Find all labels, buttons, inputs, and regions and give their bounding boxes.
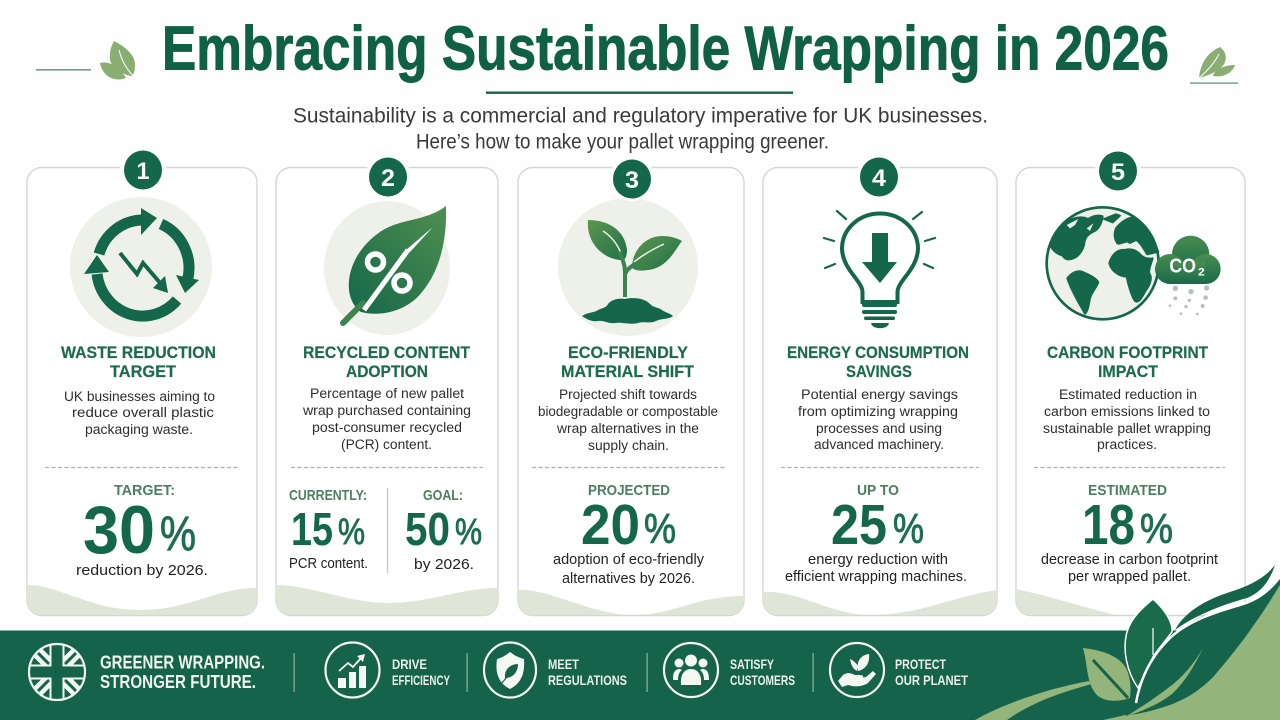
stat: 30 percent: % [160, 508, 196, 561]
stat: 20 percent: % [644, 505, 676, 552]
heading [787, 343, 969, 381]
icon: leaf with percent sign [324, 201, 450, 335]
description: post-consumer recycled [312, 420, 462, 436]
footer slogan [100, 652, 265, 692]
heading: ENERGY CONSUMPTION [787, 343, 969, 362]
icon: seedling in soil [558, 198, 698, 336]
stat: 30 percent: reduction by 2026. [76, 562, 208, 579]
stat: 18 percent [1041, 482, 1219, 585]
benefit: meet regulations: MEET [548, 656, 579, 672]
heading: RECYCLED CONTENT [303, 343, 471, 362]
panel: card 2 recycled content [276, 155, 498, 616]
stat: 25 percent: UP TO [857, 482, 899, 499]
icon: UK flag circle [28, 642, 86, 702]
decoration: right leaves [1190, 47, 1238, 84]
description: wrap purchased containing [302, 403, 471, 419]
description: advanced machinery. [814, 437, 944, 453]
description: from optimizing wrapping [798, 404, 958, 420]
stat: goal 50 percent: GOAL: [423, 487, 463, 504]
panel: card 3 eco-friendly material [518, 157, 744, 616]
stat: 30 percent: 30 [83, 492, 155, 568]
stat: 20 percent: alternatives by 2026. [562, 570, 695, 587]
description: processes and using [816, 421, 942, 437]
icon: recycling arrows with falling waste [70, 197, 212, 337]
description: Percentage of new pallet [310, 386, 464, 402]
stat: currently 15 percent: 15 [291, 503, 333, 555]
number badge 1 [120, 148, 166, 192]
stat: 25 percent: energy reduction with [808, 551, 948, 568]
description: wrap alternatives in the [556, 421, 699, 437]
footer slogan: GREENER WRAPPING. [100, 652, 265, 672]
stat: 30 percent: TARGET: [114, 482, 175, 499]
stat: 18 percent: decrease in carbon footprint [1041, 551, 1219, 568]
stat: 18 percent: ESTIMATED [1088, 482, 1167, 499]
stat: goal 50 percent: by 2026. [414, 556, 474, 573]
panel: card 5 carbon footprint [1016, 149, 1245, 616]
footer slogan: STRONGER FUTURE. [100, 672, 256, 692]
description: sustainable pallet wrapping [1043, 421, 1211, 437]
number badge 2 [365, 155, 411, 199]
description [302, 386, 471, 453]
subtitle: Here’s how to make your pallet wrapping greener. [416, 130, 829, 154]
subtitle: Sustainability is a commercial and regulatory imperative for UK businesses. [293, 104, 988, 128]
stat: 25 percent: 25 [831, 493, 887, 557]
heading [303, 343, 471, 381]
number badge 3: 3 [625, 167, 639, 194]
benefit: meet regulations [484, 642, 627, 698]
description [64, 389, 215, 438]
stat: currently 15 percent: % [338, 511, 365, 552]
stat: goal 50 percent: % [455, 511, 482, 552]
benefit: protect our planet: PROTECT [895, 656, 946, 672]
number badge 4: 4 [872, 165, 887, 192]
number badge 2: 2 [381, 165, 395, 192]
decoration: left leaves [36, 41, 137, 79]
stat: currently 15 percent: PCR content. [289, 555, 368, 572]
heading [61, 343, 216, 381]
icon: globe with CO2 cloud [1047, 207, 1221, 319]
benefit: satisfy customers: SATISFY [730, 656, 775, 672]
stat: 18 percent: 18 [1082, 493, 1135, 557]
description [1043, 387, 1211, 453]
stat: currently 15 percent [289, 487, 368, 572]
stat: 30 percent [76, 482, 208, 579]
number badge 4 [856, 155, 902, 199]
benefit: drive efficiency [326, 642, 450, 698]
heading: ADOPTION [346, 362, 428, 381]
stat: currently 15 percent: CURRENTLY: [289, 487, 367, 504]
icon: light bulb with down arrow [824, 211, 935, 328]
stat: 20 percent: 20 [581, 493, 640, 557]
benefit: protect our planet [830, 643, 968, 697]
stat: 20 percent: PROJECTED [588, 482, 670, 499]
decoration: corner leaves [975, 565, 1280, 720]
description: Estimated reduction in [1059, 387, 1197, 403]
icon: globe with CO2 cloud: CO [1169, 254, 1196, 277]
stat: 25 percent: % [893, 505, 924, 552]
benefit: satisfy customers [664, 643, 795, 697]
description: UK businesses aiming to [64, 389, 215, 405]
number badge 1: 1 [136, 158, 150, 185]
description: Potential energy savings [801, 387, 958, 403]
stat: goal 50 percent: 50 [405, 503, 450, 555]
description: reduce overall plastic [72, 405, 214, 421]
benefit: drive efficiency: DRIVE [392, 656, 427, 672]
description [538, 387, 718, 454]
benefit: protect our planet: OUR PLANET [895, 672, 968, 688]
benefit: satisfy customers: CUSTOMERS [730, 672, 795, 688]
number badge 5 [1095, 149, 1141, 193]
stat: 25 percent [785, 482, 967, 585]
description: (PCR) content. [341, 437, 432, 453]
heading: WASTE REDUCTION [61, 343, 216, 362]
stat: goal 50 percent [405, 487, 482, 573]
description: Projected shift towards [559, 387, 697, 403]
heading: IMPACT [1098, 362, 1159, 381]
number badge 5: 5 [1111, 159, 1125, 186]
stat: 20 percent: adoption of eco-friendly [553, 551, 704, 568]
footer banner [0, 630, 1280, 720]
description: carbon emissions linked to [1044, 404, 1210, 420]
description: practices. [1097, 437, 1157, 453]
title underline [486, 92, 793, 94]
heading: SAVINGS [846, 362, 912, 381]
heading: CARBON FOOTPRINT [1047, 343, 1209, 362]
description: supply chain. [588, 438, 669, 454]
benefit: meet regulations: REGULATIONS [548, 672, 627, 688]
heading: MATERIAL SHIFT [561, 362, 695, 381]
subtitle [293, 104, 988, 154]
stat: 25 percent: efficient wrapping machines. [785, 568, 967, 585]
benefit: drive efficiency: EFFICIENCY [392, 672, 450, 688]
heading [561, 343, 695, 381]
description [798, 387, 958, 453]
icon: globe with CO2 cloud: 2 [1198, 267, 1205, 279]
description: biodegradable or compostable [538, 404, 718, 420]
panel: card 4 energy savings [763, 155, 997, 616]
description: packaging waste. [85, 422, 193, 438]
heading: TARGET [110, 362, 177, 381]
stat: 18 percent: per wrapped pallet. [1068, 568, 1191, 585]
stat: 18 percent: % [1140, 505, 1173, 552]
stat: 20 percent [553, 482, 704, 587]
number badge 3 [609, 157, 655, 201]
heading: ECO-FRIENDLY [568, 343, 689, 362]
heading [1047, 343, 1209, 381]
panel: card 1 waste reduction [27, 148, 257, 616]
